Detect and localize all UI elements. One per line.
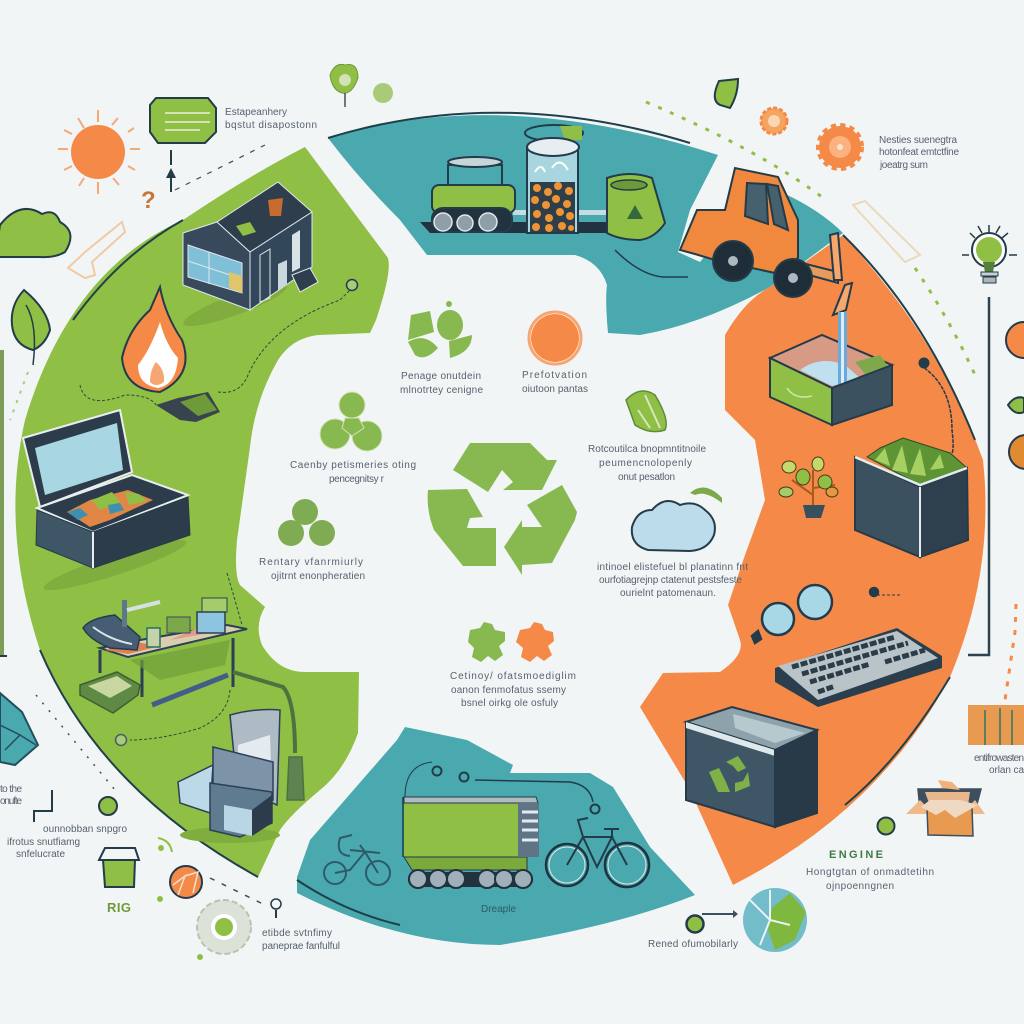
text: gear caption: etibde svtnfimy — [262, 928, 332, 939]
panel: orange right segment — [640, 235, 986, 885]
text: center right caption: peumencnolopenly — [599, 458, 692, 469]
text: right crate caption: orlan ca — [989, 765, 1024, 776]
icon: potted plant — [779, 457, 838, 518]
icon: large orange gear — [819, 126, 861, 168]
icon: center leaf bundle — [626, 391, 666, 432]
icon: right edge fruit and leaves — [1006, 322, 1024, 469]
icon: glass jar of pellets — [525, 125, 583, 233]
icon: light bulb — [962, 225, 1017, 283]
icon: dotted connector to small circle — [36, 695, 117, 815]
text: bottom right heading: ENGINE — [829, 849, 883, 861]
icon: center green trefoil — [320, 392, 382, 451]
text: center top left label: Penage onutdein — [401, 371, 481, 382]
text: bottom center caption: bsnel oirkg ole osfuly — [461, 698, 558, 709]
icon: bicycle — [546, 818, 649, 887]
icon: top conveyor machine — [420, 157, 607, 233]
icon: center orange circle — [529, 312, 581, 364]
icon: dark crate of leaves — [855, 438, 968, 557]
text: bottom teal label: Dreaple — [481, 904, 516, 915]
icon: green box with water — [770, 312, 953, 455]
icon: keyboard — [775, 628, 942, 707]
icon: green bin — [99, 848, 139, 887]
text: left bottom captions: to the — [0, 784, 22, 795]
icon: orange truck — [680, 168, 852, 315]
icon: outline tool top right — [853, 201, 920, 262]
icon: cloud with leaf — [632, 488, 722, 551]
text: top right caption — [879, 135, 959, 171]
icon: leaf — [10, 290, 50, 420]
icon: house — [183, 182, 318, 310]
text: left bottom captions — [0, 784, 127, 860]
text: center top right label — [522, 370, 588, 395]
icon: two puzzle gears — [468, 622, 554, 662]
text: top right caption: joeatrg sum — [879, 160, 928, 171]
text: top left callout caption — [225, 107, 317, 131]
icon: workbench with tools — [80, 573, 295, 753]
icon: center top leaves — [408, 301, 472, 358]
text: cloud caption: ourielnt patomenaun. — [620, 588, 716, 599]
text: cloud caption: ourfotiagrejnp ctatenut pestsfeste — [599, 575, 742, 586]
text: left bottom captions: onufte — [0, 796, 22, 807]
arc: green dotted top right path — [646, 102, 975, 375]
icon: small orange gear — [761, 108, 787, 134]
text: center right caption — [588, 444, 706, 483]
text: right crate caption: entifrowasten — [974, 753, 1024, 764]
text: top right caption: Nesties suenegtra — [879, 135, 957, 146]
text: left bottom captions: snfelucrate — [16, 849, 65, 860]
icon: dark recycling bin — [686, 707, 817, 827]
text: gear caption: paneprae fanfulful — [262, 941, 340, 952]
icon: left edge pole — [0, 350, 7, 657]
text: center top right label: Prefotvation — [522, 370, 587, 381]
text: left bottom captions: ifrotus snutfiamg — [7, 837, 80, 848]
text: left bottom captions: ounnobban snpgro — [43, 824, 127, 835]
icon: gear badge — [197, 899, 281, 960]
icon: grey collection bin kiosk — [178, 710, 304, 837]
text: three circles caption: ojitrnt enonpheratien — [271, 571, 365, 582]
text: center top left label — [400, 371, 483, 396]
text: green bin label: RIG — [107, 900, 131, 915]
text: center top right label: oiutoon pantas — [522, 384, 588, 395]
icon: globe — [743, 888, 807, 952]
text: bottom center caption — [450, 671, 576, 709]
text: bottom right caption: Hongtgtan of onmadtetihn — [806, 867, 934, 878]
text: trefoil caption — [290, 460, 416, 485]
icon: small bicycle — [324, 835, 390, 885]
icon: question mark: ? — [141, 187, 156, 214]
text: top right caption: hotonfeat emtctfine — [879, 147, 959, 158]
text: cloud caption: intinoel elistefuel bl planatinn fnt — [597, 562, 748, 573]
icon: glasses — [752, 585, 900, 643]
line: right vertical connector — [968, 297, 989, 655]
icon: teal crystal — [0, 693, 38, 765]
text: right crate caption — [974, 753, 1024, 776]
text: center top left label: mlnotrtey cenigne — [400, 385, 483, 396]
text: bottom right caption: ojnpoenngnen — [826, 881, 894, 892]
text: gear caption — [262, 928, 340, 952]
text: cloud caption — [597, 562, 748, 599]
text: bottom center caption: oanon fenmofatus ssemy — [451, 685, 566, 696]
icon: arrow with dot — [686, 910, 738, 932]
icon: cloud — [0, 209, 70, 257]
icon: orange roundel — [157, 838, 265, 905]
text: center right caption: Rotcoutilca bnopmntitnoile — [588, 444, 706, 455]
icon: central recycling symbol — [428, 443, 577, 575]
icon: orange outline tool — [68, 222, 125, 278]
icon: orange crate at edge — [968, 705, 1024, 745]
panel: green left segment — [15, 147, 389, 877]
icon: sun — [58, 110, 140, 194]
icon: top small plants — [330, 64, 393, 107]
icon: orange dotted line — [1005, 604, 1016, 700]
icon: flame and coal — [80, 280, 358, 422]
icon: center green three circles — [278, 499, 335, 546]
text: three circles caption — [259, 557, 365, 582]
text: center right caption: onut pesatlon — [618, 472, 675, 483]
text: bottom center caption: Cetinoy/ ofatsmoediglim — [450, 671, 576, 682]
icon: bottom green truck — [403, 762, 600, 888]
icon: green bucket — [607, 174, 688, 277]
text: bottom right caption — [806, 867, 934, 892]
icon: small green dot — [878, 818, 894, 834]
icon: open storage box with lid — [23, 410, 190, 568]
icon: open cardboard box — [906, 780, 985, 836]
text: top left callout caption: bqstut disapostonn — [225, 120, 317, 131]
text: trefoil caption: Caenby petismeries oting — [290, 460, 416, 471]
text: trefoil caption: pencegnitsy r — [329, 474, 385, 485]
icon: green callout sign — [150, 98, 265, 192]
panel: teal bottom segment — [297, 727, 695, 945]
text: three circles caption: Rentary vfanrmiurly — [259, 557, 363, 568]
text: arrow caption: Rened ofumobilarly — [648, 939, 738, 950]
icon: top right leaf badge — [715, 79, 738, 108]
panel: teal top segment — [328, 113, 843, 335]
text: top left callout caption: Estapeanhery — [225, 107, 287, 118]
icon: stair connector — [34, 790, 52, 822]
